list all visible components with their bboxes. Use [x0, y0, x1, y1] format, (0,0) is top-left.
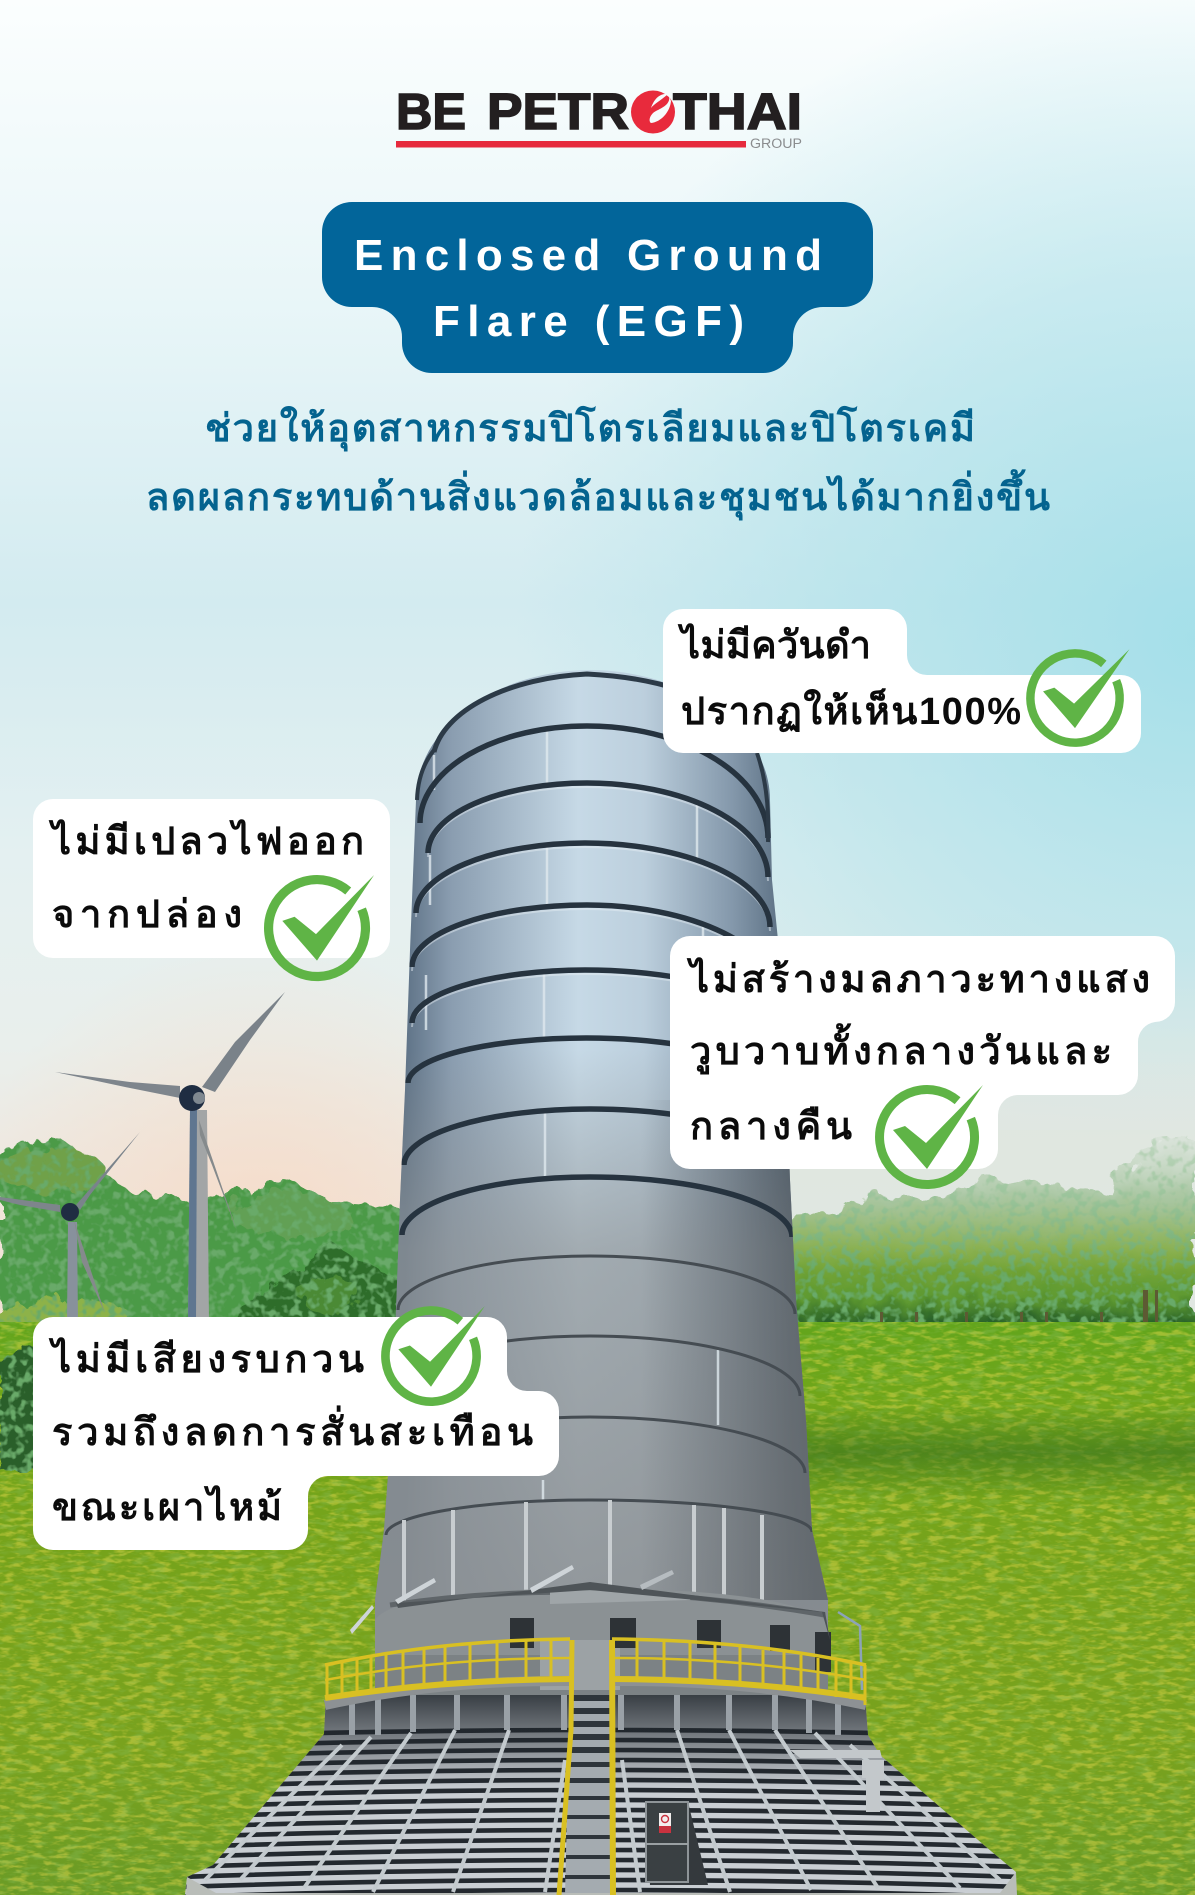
- subtitle: ช่วยให้อุตสาหกรรมปิโตรเลียมและปิโตรเคมี: [205, 405, 975, 452]
- logo: THAI: [673, 83, 802, 140]
- callout: no noise or vibration: รวมถึงลดการสั่นสะเทือน: [52, 1405, 533, 1454]
- icon: large wind turbine: [55, 992, 285, 1322]
- callout: no flame from stack: จากปล่อง: [52, 894, 242, 936]
- subtitle: ลดผลกระทบด้านสิ่งแวดล้อมและชุมชนได้มากยิ่งขึ้น: [146, 469, 1050, 521]
- cooling louvre cone: [150, 1690, 1050, 1895]
- background: grass field: [0, 1322, 1195, 1895]
- logo: GROUP: [750, 136, 802, 151]
- background: dark bush at left edge: [0, 1345, 40, 1471]
- logo: BE: [396, 83, 466, 140]
- yellow walkway railing: [325, 1639, 866, 1895]
- logo: PETR: [487, 83, 629, 140]
- callout: no light pollution: วูบวาบทั้งกลางวันและ: [690, 1023, 1112, 1075]
- background: left tree line: [0, 1138, 420, 1335]
- callout: no light pollution: ไม่สร้างมลภาวะทางแสง: [686, 957, 1150, 1001]
- title badge: Enclosed Ground: [354, 231, 822, 280]
- tower: machinery around walkway: [350, 1565, 862, 1690]
- callout: no black smoke: [663, 609, 1141, 753]
- title badge: Flare (EGF): [433, 297, 744, 346]
- logo: [396, 83, 802, 151]
- flare tower body: [370, 660, 840, 1730]
- callout: no flame from stack: [33, 799, 390, 977]
- background: right tree line: [780, 1130, 1195, 1330]
- callout: no noise or vibration: ขณะเผาไหม้: [52, 1485, 282, 1529]
- callout: no noise or vibration: [33, 1306, 559, 1550]
- background: sky: [0, 0, 1195, 1340]
- callout: no black smoke: ปรากฏให้เห็น100%: [681, 688, 1021, 733]
- callout: no light pollution: กลางคืน: [690, 1106, 852, 1148]
- callout: no noise or vibration: ไม่มีเสียงรบกวน: [48, 1337, 364, 1381]
- callout: no black smoke: ไม่มีควันดำ: [677, 623, 871, 667]
- background: dark foreground tree: [235, 1245, 410, 1320]
- concrete base ring: [186, 1872, 1017, 1895]
- subtitle: [146, 405, 1050, 521]
- access door with warning sign: [646, 1802, 708, 1885]
- pipe platform at right of cone: [790, 1750, 884, 1812]
- callout: no light pollution: [670, 936, 1175, 1185]
- callout: no flame from stack: ไม่มีเปลวไฟออก: [48, 819, 364, 863]
- icon: small wind turbine: [0, 1132, 140, 1322]
- title badge: [322, 202, 873, 373]
